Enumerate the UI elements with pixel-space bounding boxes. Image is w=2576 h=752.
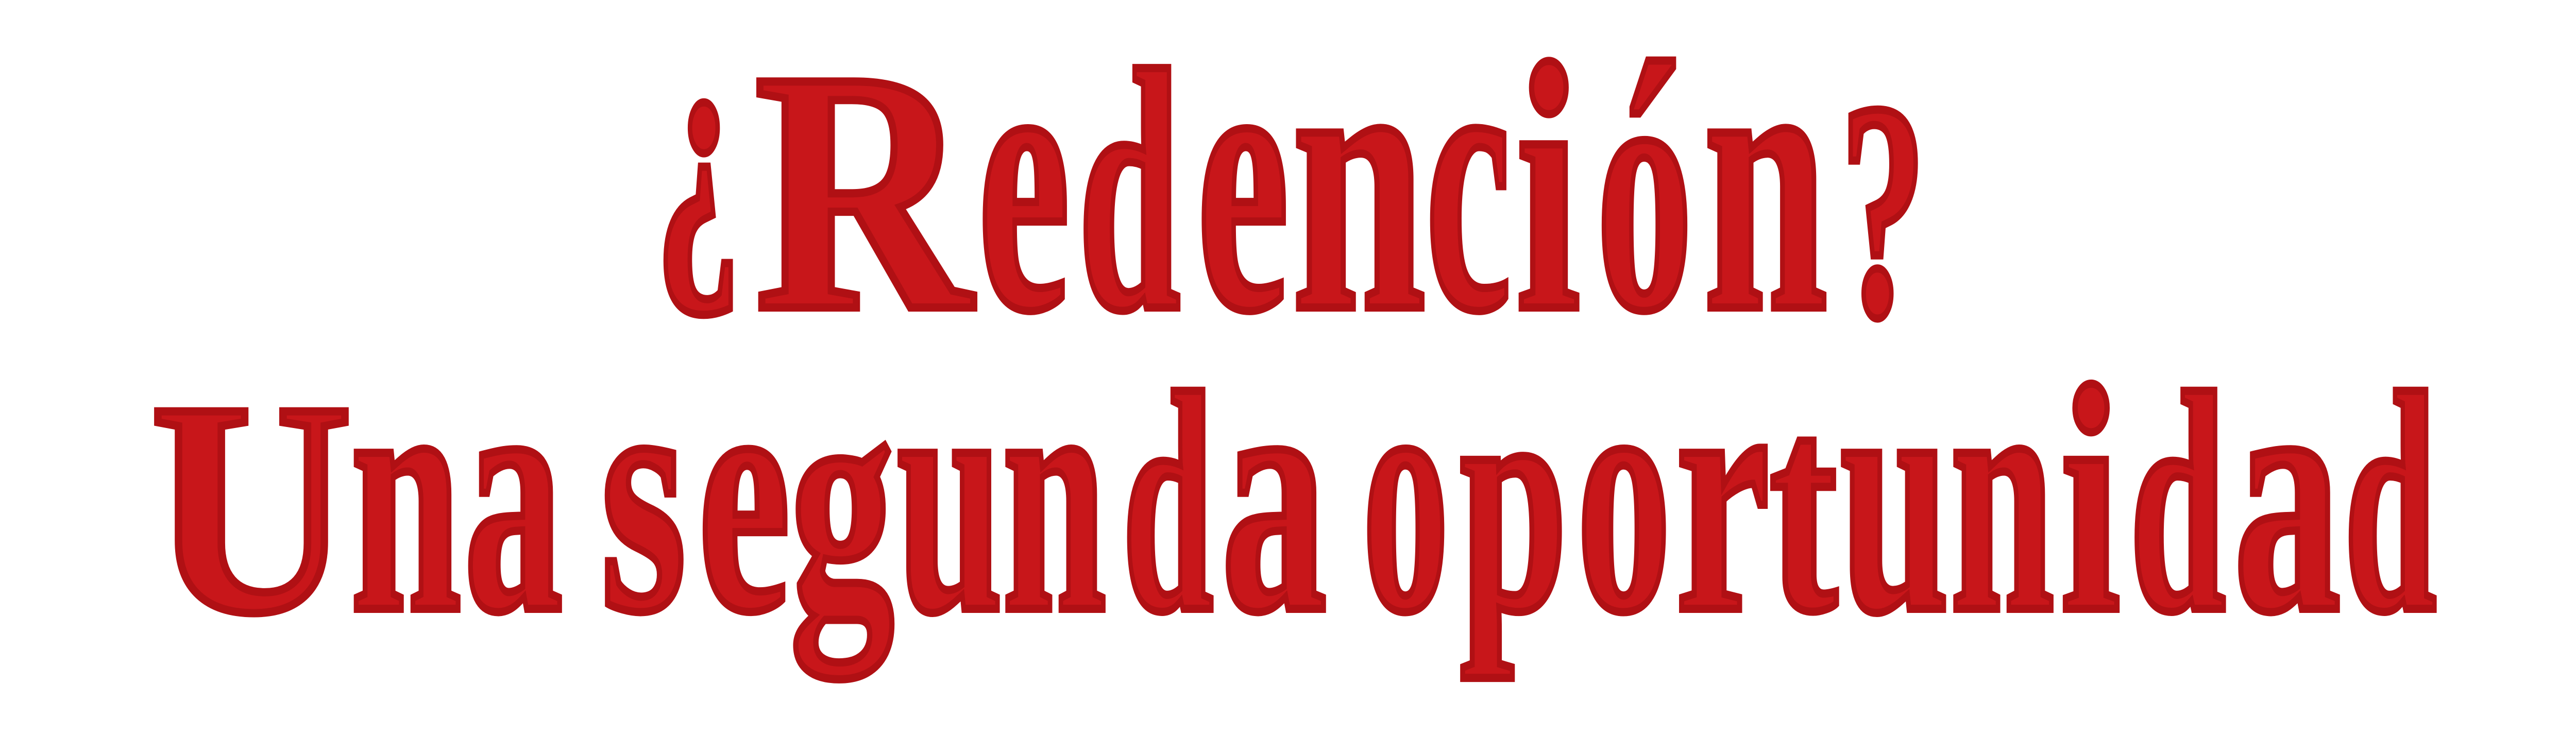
heading line 2: n: [351, 306, 461, 682]
heading line 2: e: [698, 306, 790, 682]
heading line 1: ?: [1840, 39, 1926, 381]
heading line 2: p: [1460, 320, 1567, 680]
heading line 2: r: [1676, 306, 1770, 682]
heading line 2: a: [1222, 306, 1327, 682]
heading line 2: o: [1363, 306, 1449, 682]
heading line 2: d: [2344, 329, 2436, 677]
heading line 2: u: [1840, 306, 1949, 682]
heading line 1: i: [1516, 0, 1580, 385]
heading line 2: a: [464, 306, 563, 682]
heading line 1: d: [1078, 0, 1180, 382]
heading line 2: g: [790, 325, 894, 683]
heading line 2: d: [2130, 329, 2226, 677]
heading line 2: s: [601, 306, 686, 682]
heading line 2: d: [1123, 329, 1213, 677]
heading line 2: o: [1577, 306, 1671, 682]
heading line 2: u: [897, 306, 1003, 682]
heading line 2: a: [2234, 306, 2341, 682]
heading line 2: n: [1951, 306, 2054, 682]
heading line 2: t: [1770, 343, 1839, 674]
heading line 2: U: [151, 339, 352, 676]
heading line 1: R: [755, 0, 975, 382]
heading line 2: i: [2061, 320, 2120, 679]
heading line 1: ó: [1597, 0, 1692, 385]
heading line 2: n: [1003, 306, 1106, 682]
